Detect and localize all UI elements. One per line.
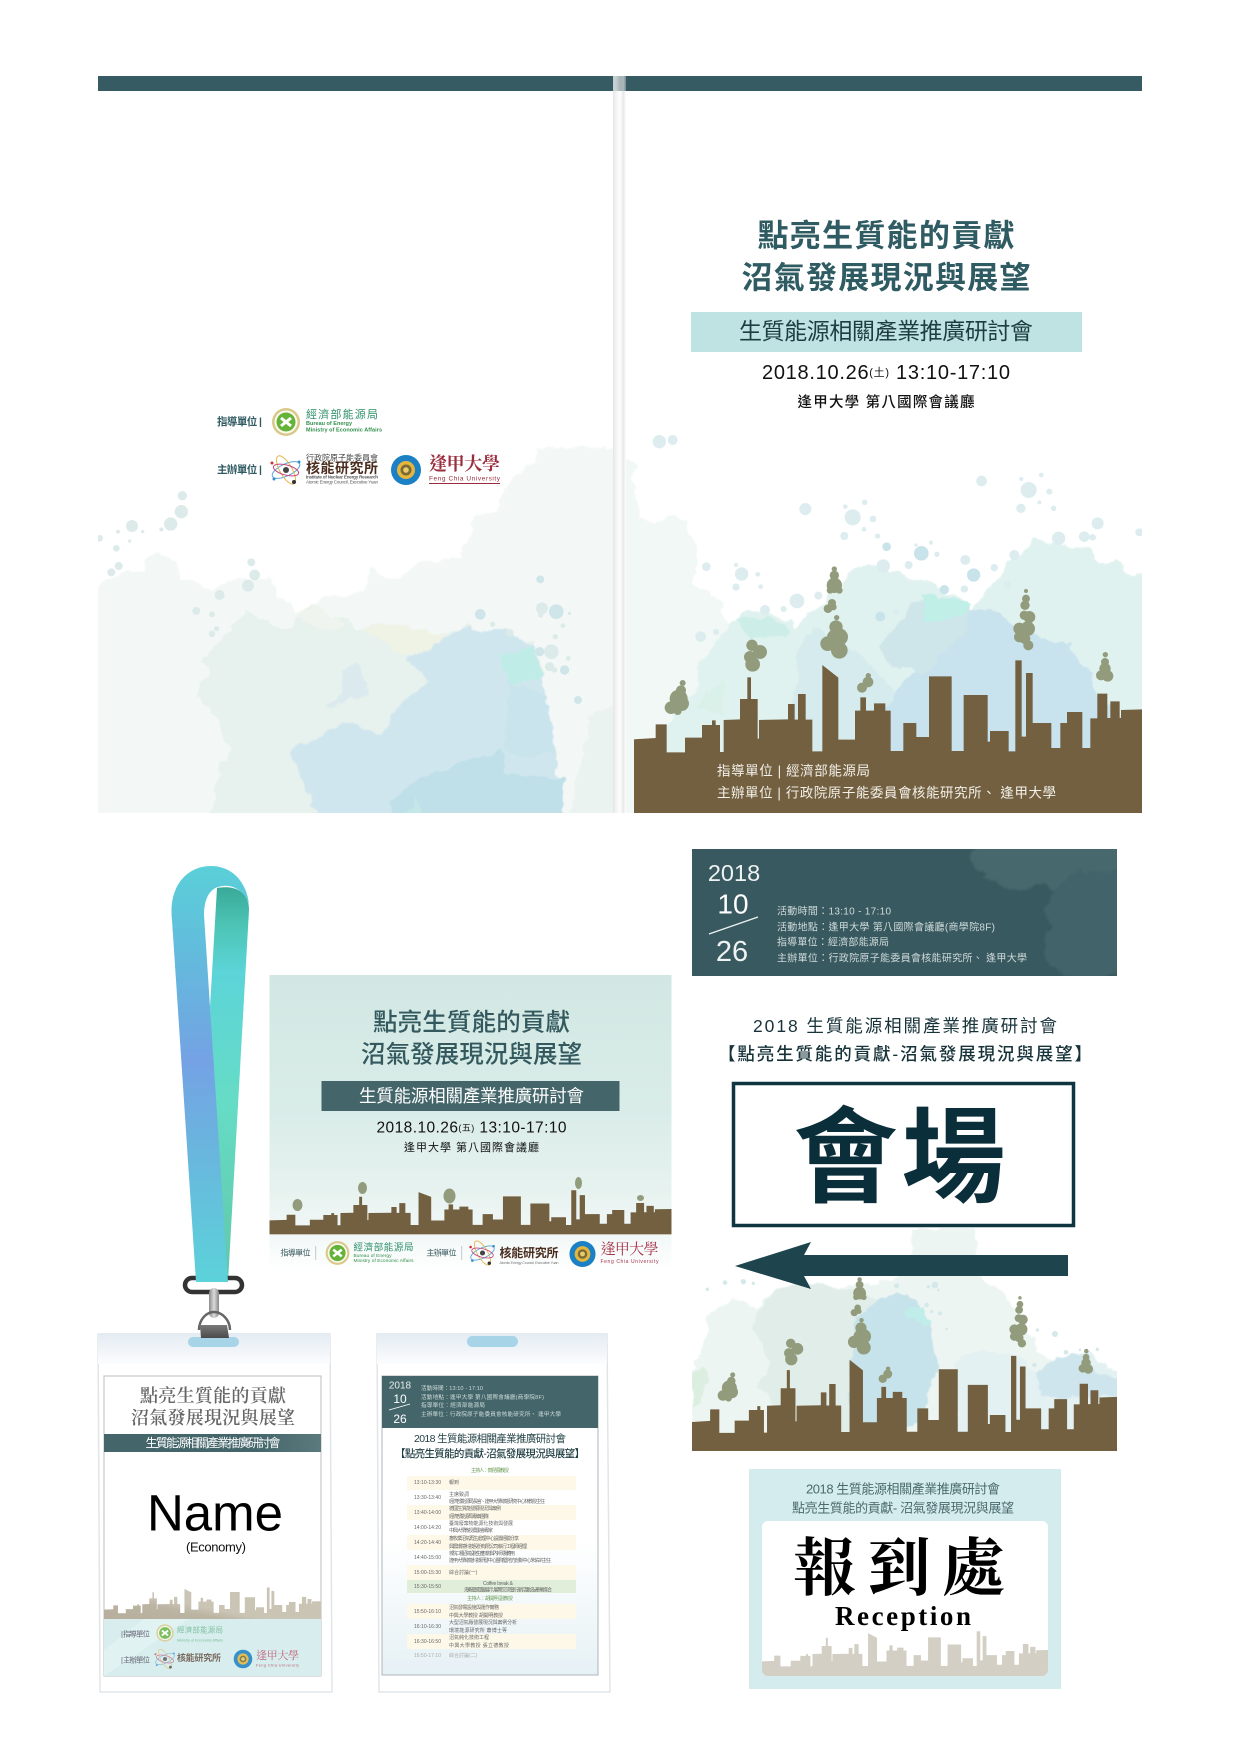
top bar	[98, 76, 1142, 91]
badge card	[104, 1376, 321, 1676]
agenda header: 活動時間：13:10 - 17:10	[421, 1384, 483, 1392]
logo: bureau of energy: Bureau of Energy	[306, 421, 353, 427]
badge logo panel: 逢甲大學	[256, 1648, 299, 1662]
watercolor under sign	[692, 1228, 1117, 1433]
label: organizer: 主辦單位 |	[217, 463, 262, 476]
logo: institute of nuclear energy research: 核能研究所	[306, 460, 378, 476]
logo: institute of nuclear energy research: 行政院原子能委員會	[306, 452, 378, 462]
date numerals	[708, 860, 760, 968]
poster band	[322, 1081, 620, 1111]
poster logos: 核能研究所	[500, 1245, 558, 1260]
agenda table: 主席致詞	[449, 1491, 469, 1498]
sign ink splatter	[706, 1279, 1099, 1367]
agenda title: 【點亮生質能的貢獻-沼氣發展現況與展望】	[395, 1447, 585, 1460]
agenda table: 沼氣發電設施與運作實務	[449, 1604, 499, 1611]
reception skyline	[762, 1631, 1048, 1676]
poster logos	[280, 1239, 659, 1267]
title: 沼氣發展現況與展望	[742, 260, 1030, 296]
poster venue: 逢甲大學 第八國際會議廳	[404, 1140, 539, 1154]
agenda table: 畜牧業沼氣再生處理中心設置經驗分享	[449, 1535, 519, 1542]
agenda table: 13:40-14:00	[414, 1510, 441, 1516]
badge logo panel: 核能研究所	[177, 1652, 221, 1663]
poster logos: 主辦單位	[426, 1248, 456, 1258]
panel: poster	[270, 975, 672, 1270]
agenda table: 14:00-14:20	[414, 1525, 441, 1531]
panel: booklet cover spread	[88, 76, 1159, 833]
agenda header: 10	[393, 1392, 407, 1406]
clip ring	[185, 1278, 242, 1292]
agenda table: 環境能源研究所 蕭博士等	[449, 1627, 507, 1634]
badge skyline	[104, 1588, 321, 1619]
poster title: 點亮生質能的貢獻	[373, 1008, 570, 1036]
agenda table: 綜合討論(一)	[449, 1569, 478, 1576]
watercolor background: right page	[616, 435, 1159, 833]
agenda table: 15:00-15:30	[414, 1570, 441, 1576]
event details: 活動時間：13:10 - 17:10	[777, 904, 891, 918]
title: 點亮生質能的貢獻	[758, 218, 1014, 254]
agenda table: 15:30-15:50	[414, 1584, 441, 1590]
agenda table: 沼氣純化技術工程	[449, 1634, 489, 1641]
poster skyline	[270, 1190, 672, 1234]
holder slot	[188, 1337, 239, 1347]
badge category: (Economy)	[186, 1540, 246, 1554]
agenda header: 指導單位：經濟部能源局	[421, 1401, 485, 1409]
agenda table: 16:50-17:10	[414, 1653, 441, 1659]
poster date: 2018.10.26(五) 13:10-17:10	[376, 1120, 567, 1136]
agenda table: 16:30-16:50	[414, 1639, 441, 1645]
agenda header: 26	[393, 1412, 407, 1426]
agenda header: 2018	[389, 1380, 412, 1392]
agenda table: 主持人：胡開明 副教授	[467, 1595, 513, 1602]
back slot	[467, 1336, 518, 1347]
badge name: Name	[147, 1484, 283, 1542]
agenda title: 2018 生質能源相關產業推廣研討會	[414, 1432, 566, 1445]
agenda table: 報到	[449, 1479, 459, 1486]
agenda table	[407, 1467, 576, 1659]
event details: 主辦單位：行政院原子能委員會核能研究所、 逢甲大學	[777, 952, 1027, 964]
footer organizers	[717, 764, 1056, 800]
reception heading: 2018 生質能源相關產業推廣研討會	[806, 1482, 1000, 1496]
badge logo panel: Ministry of Economic Affairs	[177, 1638, 223, 1642]
agenda table: 主持人：蔡昆展教授	[471, 1467, 509, 1474]
agenda card	[382, 1376, 598, 1675]
venue box: 會場	[794, 1101, 1006, 1217]
event details: 活動地點：逢甲大學 第八國際會議廳(商學院8F)	[777, 920, 995, 934]
agenda table: 15:50-16:10	[414, 1609, 441, 1615]
reception card	[762, 1521, 1048, 1689]
poster logos: 逢甲大學	[600, 1241, 658, 1258]
agenda table: 大型沼氣厰發展現況與案例分析	[449, 1619, 517, 1626]
badge logo panel: | 指導單位	[121, 1628, 150, 1638]
sign heading: 2018 生質能源相關產業推廣研討會	[753, 1016, 1057, 1036]
venue box	[734, 1084, 1074, 1226]
agenda table: 中興大學教授 胡開明教授	[449, 1612, 503, 1619]
agenda table: 13:30-13:40	[414, 1495, 441, 1501]
logo: institute of nuclear energy research	[270, 452, 378, 487]
logo: feng chia university: 逢甲大學	[429, 453, 500, 474]
logo: feng chia university	[391, 453, 501, 485]
reception card: 報到處	[793, 1534, 1005, 1604]
sign heading	[718, 1016, 1092, 1064]
sign skyline	[692, 1277, 1117, 1451]
badge logo panel: | 主辦單位	[121, 1654, 150, 1664]
date numerals: 10	[717, 888, 749, 920]
right page ink splatter	[653, 435, 1143, 642]
back holder	[377, 1334, 610, 1692]
date: 2018.10.26(土) 13:10-17:10	[762, 362, 1010, 384]
logo: feng chia university: Feng Chia University	[429, 476, 501, 482]
poster logos: Atomic Energy Council, Executive Yuan	[500, 1261, 558, 1265]
panel: event sign	[692, 849, 1117, 1451]
date numerals: 2018	[708, 860, 760, 886]
watercolor background: left page	[98, 446, 613, 813]
sign heading: 【點亮生質能的貢獻-沼氣發展現況與展望】	[718, 1044, 1092, 1064]
agenda table: 校院二種沼氣設施生產技術與內外現場應用	[449, 1550, 515, 1557]
logos: left page	[217, 407, 501, 487]
agenda table: 13:10-13:30	[414, 1480, 441, 1486]
poster logos: Bureau of Energy	[354, 1253, 392, 1259]
panel: name badge front	[98, 1325, 332, 1692]
agenda table: 中興大學教授 農委會專家	[449, 1527, 493, 1534]
spine	[613, 76, 626, 813]
poster logos: Ministry of Economic Affairs	[354, 1258, 414, 1264]
agenda header: 活動地點：逢甲大學 第八國際會議廳(商學院8F)	[421, 1393, 544, 1401]
agenda header: 主辦單位：行政院原子能委員會核能研究所、 逢甲大學	[421, 1410, 561, 1418]
subtitle band	[691, 312, 1082, 352]
logo: institute of nuclear energy research: Institute of Nuclear Energy Research	[306, 474, 378, 480]
agenda table: 海報暨電腦展示 展覽交流暨行銷活動及產業媒合	[464, 1586, 552, 1594]
sign date banner	[692, 849, 1117, 976]
poster title: 沼氣發展現況與展望	[361, 1040, 582, 1068]
badge title	[131, 1385, 295, 1428]
reception heading: 點亮生質能的貢獻- 沼氣發展現況與展望	[792, 1500, 1014, 1516]
logo: institute of nuclear energy research: Atomic Energy Council, Executive Yuan	[306, 480, 378, 484]
poster band: 生質能源相關產業推廣研討會	[359, 1086, 584, 1106]
badge logo panel: 經濟部能源局	[177, 1624, 223, 1634]
date numerals: 26	[716, 936, 748, 968]
badge logo panel: Feng Chia University	[256, 1662, 299, 1668]
agenda table: 逢甲大學綠能科技研發中心團隊暨地方創新中心 朱佑宗主任	[449, 1557, 551, 1564]
poster logos: Feng Chia University	[600, 1259, 659, 1265]
panel: reception sign	[749, 1469, 1061, 1689]
subtitle band: 生質能源相關產業推廣研討會	[739, 318, 1033, 344]
badge logo panel	[104, 1619, 321, 1676]
panel: name badge back with agenda	[377, 1333, 610, 1692]
skyline illustration	[634, 566, 1142, 813]
agenda table: 14:20-14:40	[414, 1540, 441, 1546]
badge title: 點亮生質能的貢獻	[140, 1385, 287, 1406]
poster logos: 指導單位	[280, 1248, 310, 1258]
badge band: 生質能源相關產業推廣研討會	[146, 1435, 280, 1450]
event details	[777, 904, 1027, 964]
agenda table: 臺灣廢棄物能源化技術與發展	[449, 1520, 513, 1527]
agenda table: 14:40-15:00	[414, 1555, 441, 1561]
clip hook	[199, 1312, 230, 1330]
badge holder	[98, 1334, 332, 1692]
agenda table: 中興大學教授 張立德教授	[449, 1642, 509, 1649]
holder clamp	[200, 1325, 229, 1338]
venue: 逢甲大學 第八國際會議廳	[798, 393, 974, 411]
arrow	[735, 1242, 1068, 1289]
agenda table: 經濟部能源局 專案團隊	[449, 1513, 489, 1520]
agenda table: Coffee break &	[483, 1581, 514, 1587]
logo: bureau of energy	[272, 407, 382, 436]
poster smoke	[292, 1177, 644, 1211]
agenda table: 經濟部能源局長官、逢甲大學綠能研究中心林教授主任	[449, 1498, 545, 1505]
badge band	[104, 1434, 321, 1452]
logo: bureau of energy: 經濟部能源局	[306, 407, 378, 421]
agenda header	[382, 1376, 598, 1428]
footer organizers: 主辦單位 | 行政院原子能委員會核能研究所、 逢甲大學	[717, 786, 1056, 800]
agenda table: 德國生質能發展現況與案例	[449, 1505, 501, 1512]
event details: 指導單位：經濟部能源局	[777, 936, 889, 948]
left page ink splatter	[96, 491, 582, 704]
agenda table: 16:10-16:30	[414, 1624, 441, 1630]
badge title: 沼氣發展現況與展望	[131, 1408, 295, 1428]
agenda table: 綜合討論(二)	[449, 1652, 478, 1659]
agenda title	[395, 1432, 585, 1460]
poster title	[361, 1008, 582, 1068]
reception heading	[792, 1482, 1014, 1516]
icon: lanyard	[171, 866, 249, 1330]
title	[742, 218, 1030, 296]
logo: bureau of energy: Ministry of Economic Affairs	[306, 428, 382, 434]
footer organizers: 指導單位 | 經濟部能源局	[717, 764, 870, 778]
clip post	[209, 1288, 219, 1318]
agenda table: 興農環境科技股份有限公司 執行工程師經理	[449, 1543, 527, 1550]
label: advisor: 指導單位 |	[217, 415, 262, 428]
reception card: Reception	[835, 1601, 971, 1631]
poster logos: 經濟部能源局	[354, 1242, 414, 1254]
